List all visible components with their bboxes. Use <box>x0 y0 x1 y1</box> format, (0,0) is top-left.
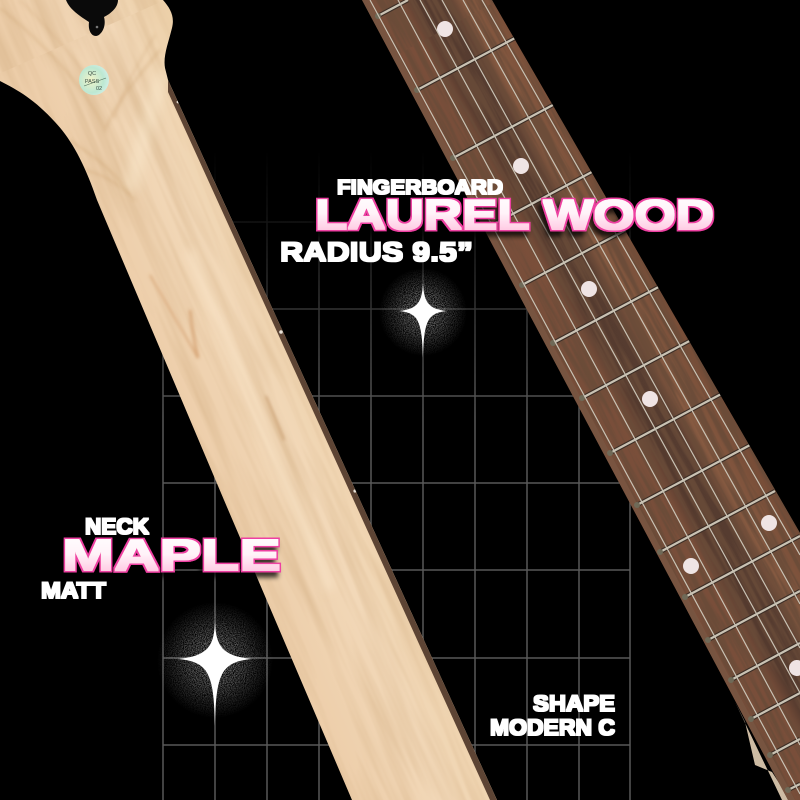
QC sticker <box>79 65 109 95</box>
label: modern c: MODERN C <box>490 715 615 740</box>
label: neck: NECK <box>85 514 149 539</box>
QC sticker: PASS <box>85 79 99 85</box>
sparkle: lower star <box>157 602 273 726</box>
wood grain: fingerboard <box>350 0 800 800</box>
label: fingerboard: FINGERBOARD <box>337 177 503 199</box>
neck highlights <box>130 70 330 590</box>
frets <box>378 0 800 790</box>
maple neck <box>0 0 520 800</box>
grid backdrop <box>163 150 630 800</box>
sparkle: upper star <box>379 268 467 358</box>
fingerboard edge <box>362 0 795 800</box>
fret ends <box>375 13 791 793</box>
QC sticker: 02 <box>96 86 102 92</box>
headstock shading and grain <box>0 0 284 440</box>
heading: laurel wood: LAUREL WOOD <box>315 191 714 238</box>
fingerboard <box>350 0 800 800</box>
wood grain: neck <box>0 0 520 800</box>
inlay dots <box>437 21 800 676</box>
heading: maple: MAPLE <box>62 531 281 580</box>
edge strip <box>168 80 497 800</box>
label: shape: SHAPE <box>533 691 615 716</box>
neck tip below fingerboard <box>735 702 790 800</box>
label: radius: RADIUS 9.5” <box>280 237 473 267</box>
side markers <box>177 101 357 493</box>
tuner peg <box>66 0 118 36</box>
label: matt: MATT <box>41 578 107 603</box>
QC sticker: QC <box>88 71 96 77</box>
strings <box>370 0 800 794</box>
